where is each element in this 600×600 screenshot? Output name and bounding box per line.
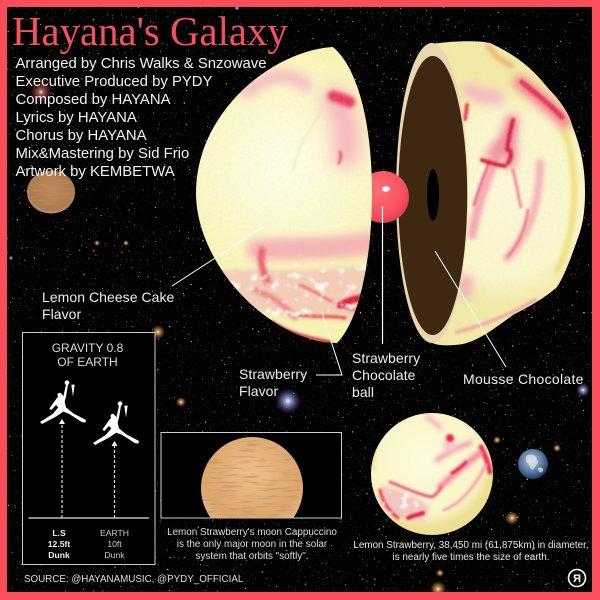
logo badge: [568, 570, 586, 586]
panel: gravity comparison: [22, 332, 155, 564]
icon: jumper L.S: [40, 380, 86, 424]
callout: Strawberry Chocolate ball: Chocolate: [352, 367, 416, 383]
ground line: [28, 517, 149, 519]
ice cream shell: [432, 41, 585, 346]
L.S stats: L.S: [52, 528, 66, 538]
earth: [518, 449, 548, 479]
moon caption: Lemon Strawberry's moon Cappuccino: [167, 527, 337, 538]
callout: Strawberry Chocolate ball: [352, 206, 420, 400]
hole: [427, 169, 439, 221]
credits text block: Composed by HAYANA: [16, 92, 171, 108]
Earth stats: [100, 528, 129, 560]
source line: SOURCE: @HAYANAMUSIC, @PYDY_OFFICIAL: [24, 574, 244, 585]
bottom planet: Lemon Strawberry: [370, 412, 495, 537]
callout: Strawberry Flavor: [239, 313, 342, 399]
panel: moon Cappuccino: [160, 432, 342, 518]
gravity heading: OF EARTH: [57, 355, 118, 369]
moon caption: [167, 527, 337, 562]
callout: Lemon Cheese Cake Flavor: Flavor: [42, 306, 81, 322]
chocolate disc: [398, 56, 467, 335]
credits text block: Chorus by HAYANA: [16, 128, 147, 144]
credits text block: [16, 56, 267, 180]
L.S stats: [48, 528, 70, 560]
logo badge: R: [573, 573, 581, 585]
credits text block: Arranged by Chris Walks & Snzowave: [16, 56, 267, 72]
Earth stats: Dunk: [104, 550, 125, 560]
arrow: Earth jump height: [112, 441, 118, 518]
gravity heading: [52, 341, 124, 369]
L.S stats: 12.5ft: [48, 539, 70, 549]
callout: Lemon Cheese Cake Flavor: Lemon Cheese Cake: [42, 289, 175, 305]
cream rim: [396, 43, 468, 343]
title: Hayana's Galaxy: [12, 9, 288, 54]
Earth stats: EARTH: [100, 528, 129, 538]
credits text block: Executive Produced by PYDY: [16, 74, 213, 90]
callout: Strawberry Flavor: Strawberry: [239, 366, 307, 382]
right hemisphere with chocolate interior: [396, 41, 585, 346]
credits text block: Mix&Mastering by Sid Frio: [16, 146, 189, 162]
gravity heading: GRAVITY 0.8: [52, 341, 124, 355]
Earth stats: 10ft: [107, 539, 122, 549]
callout: Strawberry Chocolate ball: ball: [352, 384, 374, 400]
credits text block: Lyrics by HAYANA: [16, 110, 137, 126]
strawberry chocolate ball: [357, 171, 409, 223]
callout: Lemon Cheese Cake Flavor: [42, 227, 263, 322]
callout: Strawberry Flavor: Flavor: [239, 383, 278, 399]
left hemisphere: [196, 47, 372, 343]
L.S stats: Dunk: [48, 550, 70, 560]
moon caption: system that orbits "softly".: [196, 551, 308, 562]
arrow: L.S jump height: [59, 419, 65, 518]
moon caption: is the only major moon in the solar: [177, 539, 328, 550]
planet caption: Lemon Strawberry, 38,450 mi (61,875km) in diameter,: [353, 540, 589, 551]
moon image: [201, 437, 303, 518]
callout: Mousse Chocolate: Mousse Chocolate: [463, 371, 584, 387]
credits text block: Artwork by KEMBETWA: [16, 164, 175, 180]
icon: jumper Earth: [93, 401, 139, 445]
small moon: [27, 170, 75, 214]
callout: Strawberry Chocolate ball: Strawberry: [352, 350, 420, 366]
planet caption: [353, 540, 589, 563]
planet caption: is nearly five times the size of earth.: [393, 552, 549, 563]
callout: Mousse Chocolate: [435, 251, 584, 387]
